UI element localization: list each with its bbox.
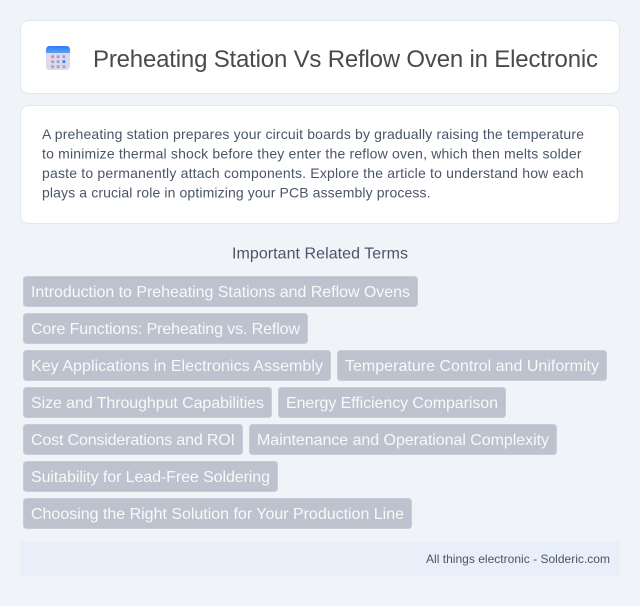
tag: Cost Considerations and ROI [31,432,235,449]
intro text [42,126,584,200]
tag [24,276,418,306]
tag [24,462,278,492]
intro text: plays a crucial role in optimizing your PCB assembly process. [42,184,430,200]
tag [24,314,308,344]
tag: Choosing the Right Solution for Your Production Line [31,506,404,523]
intro text: paste to permanently attach components. Explore the article to understand how each [42,165,584,181]
tag [24,498,412,528]
tag: Temperature Control and Uniformity [345,358,599,375]
tag [250,424,556,454]
tag: Energy Efficiency Comparison [286,395,498,412]
intro text: A preheating station prepares your circuit boards by gradually raising the temperature [42,126,584,142]
tag [24,350,330,380]
tag: Key Applications in Electronics Assembly [31,358,323,375]
tag [24,424,242,454]
panel: intro card [20,106,620,224]
footer [20,542,620,576]
tag [338,350,606,380]
heading: related terms: Important Related Terms [232,246,408,262]
tag: Maintenance and Operational Complexity [257,432,549,449]
tag [278,388,506,418]
intro text: to minimize thermal shock before they enter the reflow oven, which then melts solder [42,146,582,162]
panel: title card [20,20,620,94]
tag: Introduction to Preheating Stations and Reflow Ovens [31,284,410,301]
icon: calendar [46,46,70,70]
related terms tags [24,276,606,528]
tag: Suitability for Lead-Free Soldering [31,469,270,486]
title: Preheating Station Vs Reflow Oven in Electronic [93,46,598,73]
tag: Core Functions: Preheating vs. Reflow [31,321,300,338]
footer: All things electronic - Solderic.com [426,552,610,566]
tag [24,388,272,418]
tag: Size and Throughput Capabilities [31,395,264,412]
